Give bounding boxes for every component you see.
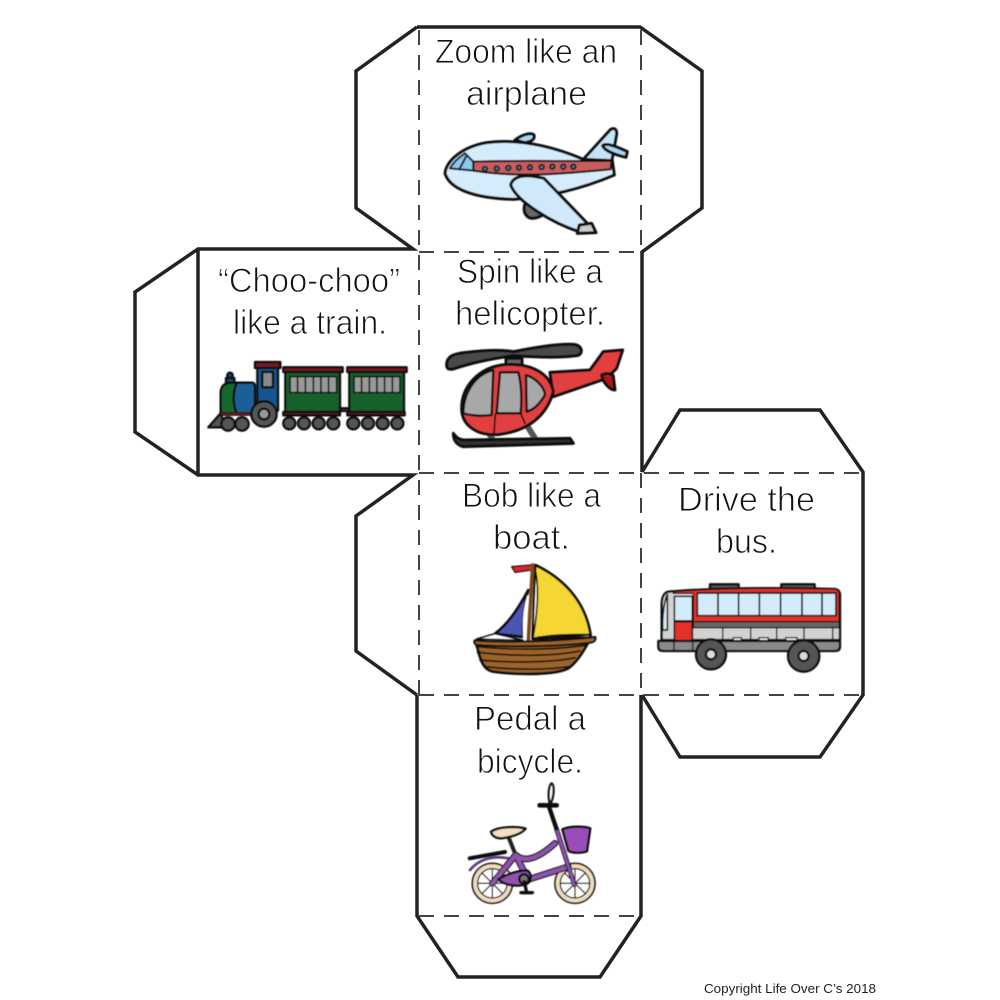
label: drive the bus: Drive the — [678, 481, 815, 519]
icon: airplane — [445, 129, 627, 233]
panel: bicycle — [470, 700, 595, 903]
copyright: Copyright Life Over C’s 2018 — [704, 982, 876, 996]
label: bob like a boat: Bob like a — [462, 477, 601, 515]
label: zoom like an airplane: Zoom like an — [435, 33, 617, 71]
panel: airplane — [435, 33, 627, 233]
panel: helicopter — [447, 253, 623, 447]
cube net outline — [135, 27, 863, 977]
label: spin like a helicopter: Spin like a — [457, 253, 603, 291]
label: choo-choo like a train: “Choo-choo” — [218, 262, 400, 300]
icon: train — [208, 362, 407, 431]
label: drive the bus — [678, 481, 815, 561]
icon: bus — [658, 584, 840, 672]
label: spin like a helicopter: helicopter. — [455, 295, 605, 333]
icon: helicopter — [447, 344, 623, 447]
label: spin like a helicopter — [455, 253, 605, 333]
label: zoom like an airplane: airplane — [466, 75, 587, 113]
label: pedal a bicycle: Pedal a — [474, 700, 586, 738]
dashed fold lines — [419, 30, 863, 916]
label: zoom like an airplane — [435, 33, 617, 113]
label: pedal a bicycle — [474, 700, 586, 781]
label: bob like a boat — [462, 477, 601, 557]
panel: train — [208, 262, 407, 431]
icon: bicycle — [470, 783, 595, 903]
label: bob like a boat: boat. — [493, 519, 570, 557]
panel: boat — [462, 477, 601, 674]
label: pedal a bicycle: bicycle. — [477, 743, 583, 781]
label: choo-choo like a train: like a train. — [233, 304, 387, 342]
panel: bus — [658, 481, 840, 672]
icon: sailboat — [474, 565, 596, 674]
label: drive the bus: bus. — [716, 523, 777, 561]
label: choo-choo like a train — [218, 262, 400, 342]
